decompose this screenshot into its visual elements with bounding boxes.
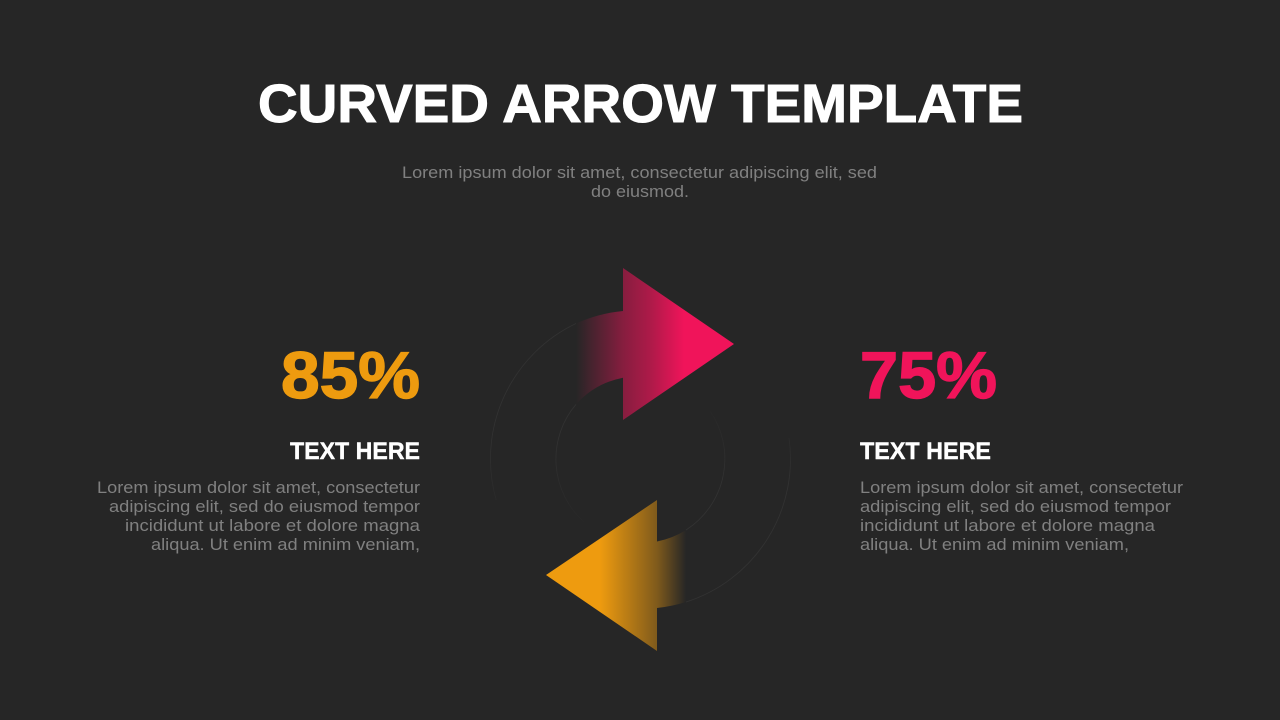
heading: left: TEXT HERE <box>290 438 420 465</box>
text block: left: aliqua. Ut enim ad minim veniam, <box>151 535 420 554</box>
text block: right: incididunt ut labore et dolore magna <box>860 516 1156 535</box>
text block: right: adipiscing elit, sed do eiusmod tempor <box>860 497 1171 516</box>
text block: right: aliqua. Ut enim ad minim veniam, <box>860 535 1129 554</box>
arrow: orange bottom <box>546 500 686 651</box>
panel: left statistic <box>97 338 421 554</box>
text block: right <box>860 478 1183 554</box>
heading: right: TEXT HERE <box>860 438 991 465</box>
panel: right statistic <box>860 338 1183 554</box>
subtitle <box>402 163 877 201</box>
text block: left: Lorem ipsum dolor sit amet, consectetur <box>97 478 420 497</box>
text block: right: Lorem ipsum dolor sit amet, consectetur <box>860 478 1183 497</box>
subtitle: do eiusmod. <box>591 182 689 201</box>
text block: left: adipiscing elit, sed do eiusmod tempor <box>109 497 420 516</box>
percentage: 85%: 85% <box>281 338 420 412</box>
arrow: pink top <box>576 268 734 420</box>
thin arc outlines <box>490 324 790 602</box>
percentage: 75%: 75% <box>860 338 997 412</box>
text block: left <box>97 478 421 554</box>
subtitle: Lorem ipsum dolor sit amet, consectetur adipiscing elit, sed <box>402 163 877 182</box>
text block: left: incididunt ut labore et dolore magna <box>125 516 421 535</box>
curved arrow cycle <box>490 268 790 651</box>
title: CURVED ARROW TEMPLATE <box>258 74 1023 134</box>
